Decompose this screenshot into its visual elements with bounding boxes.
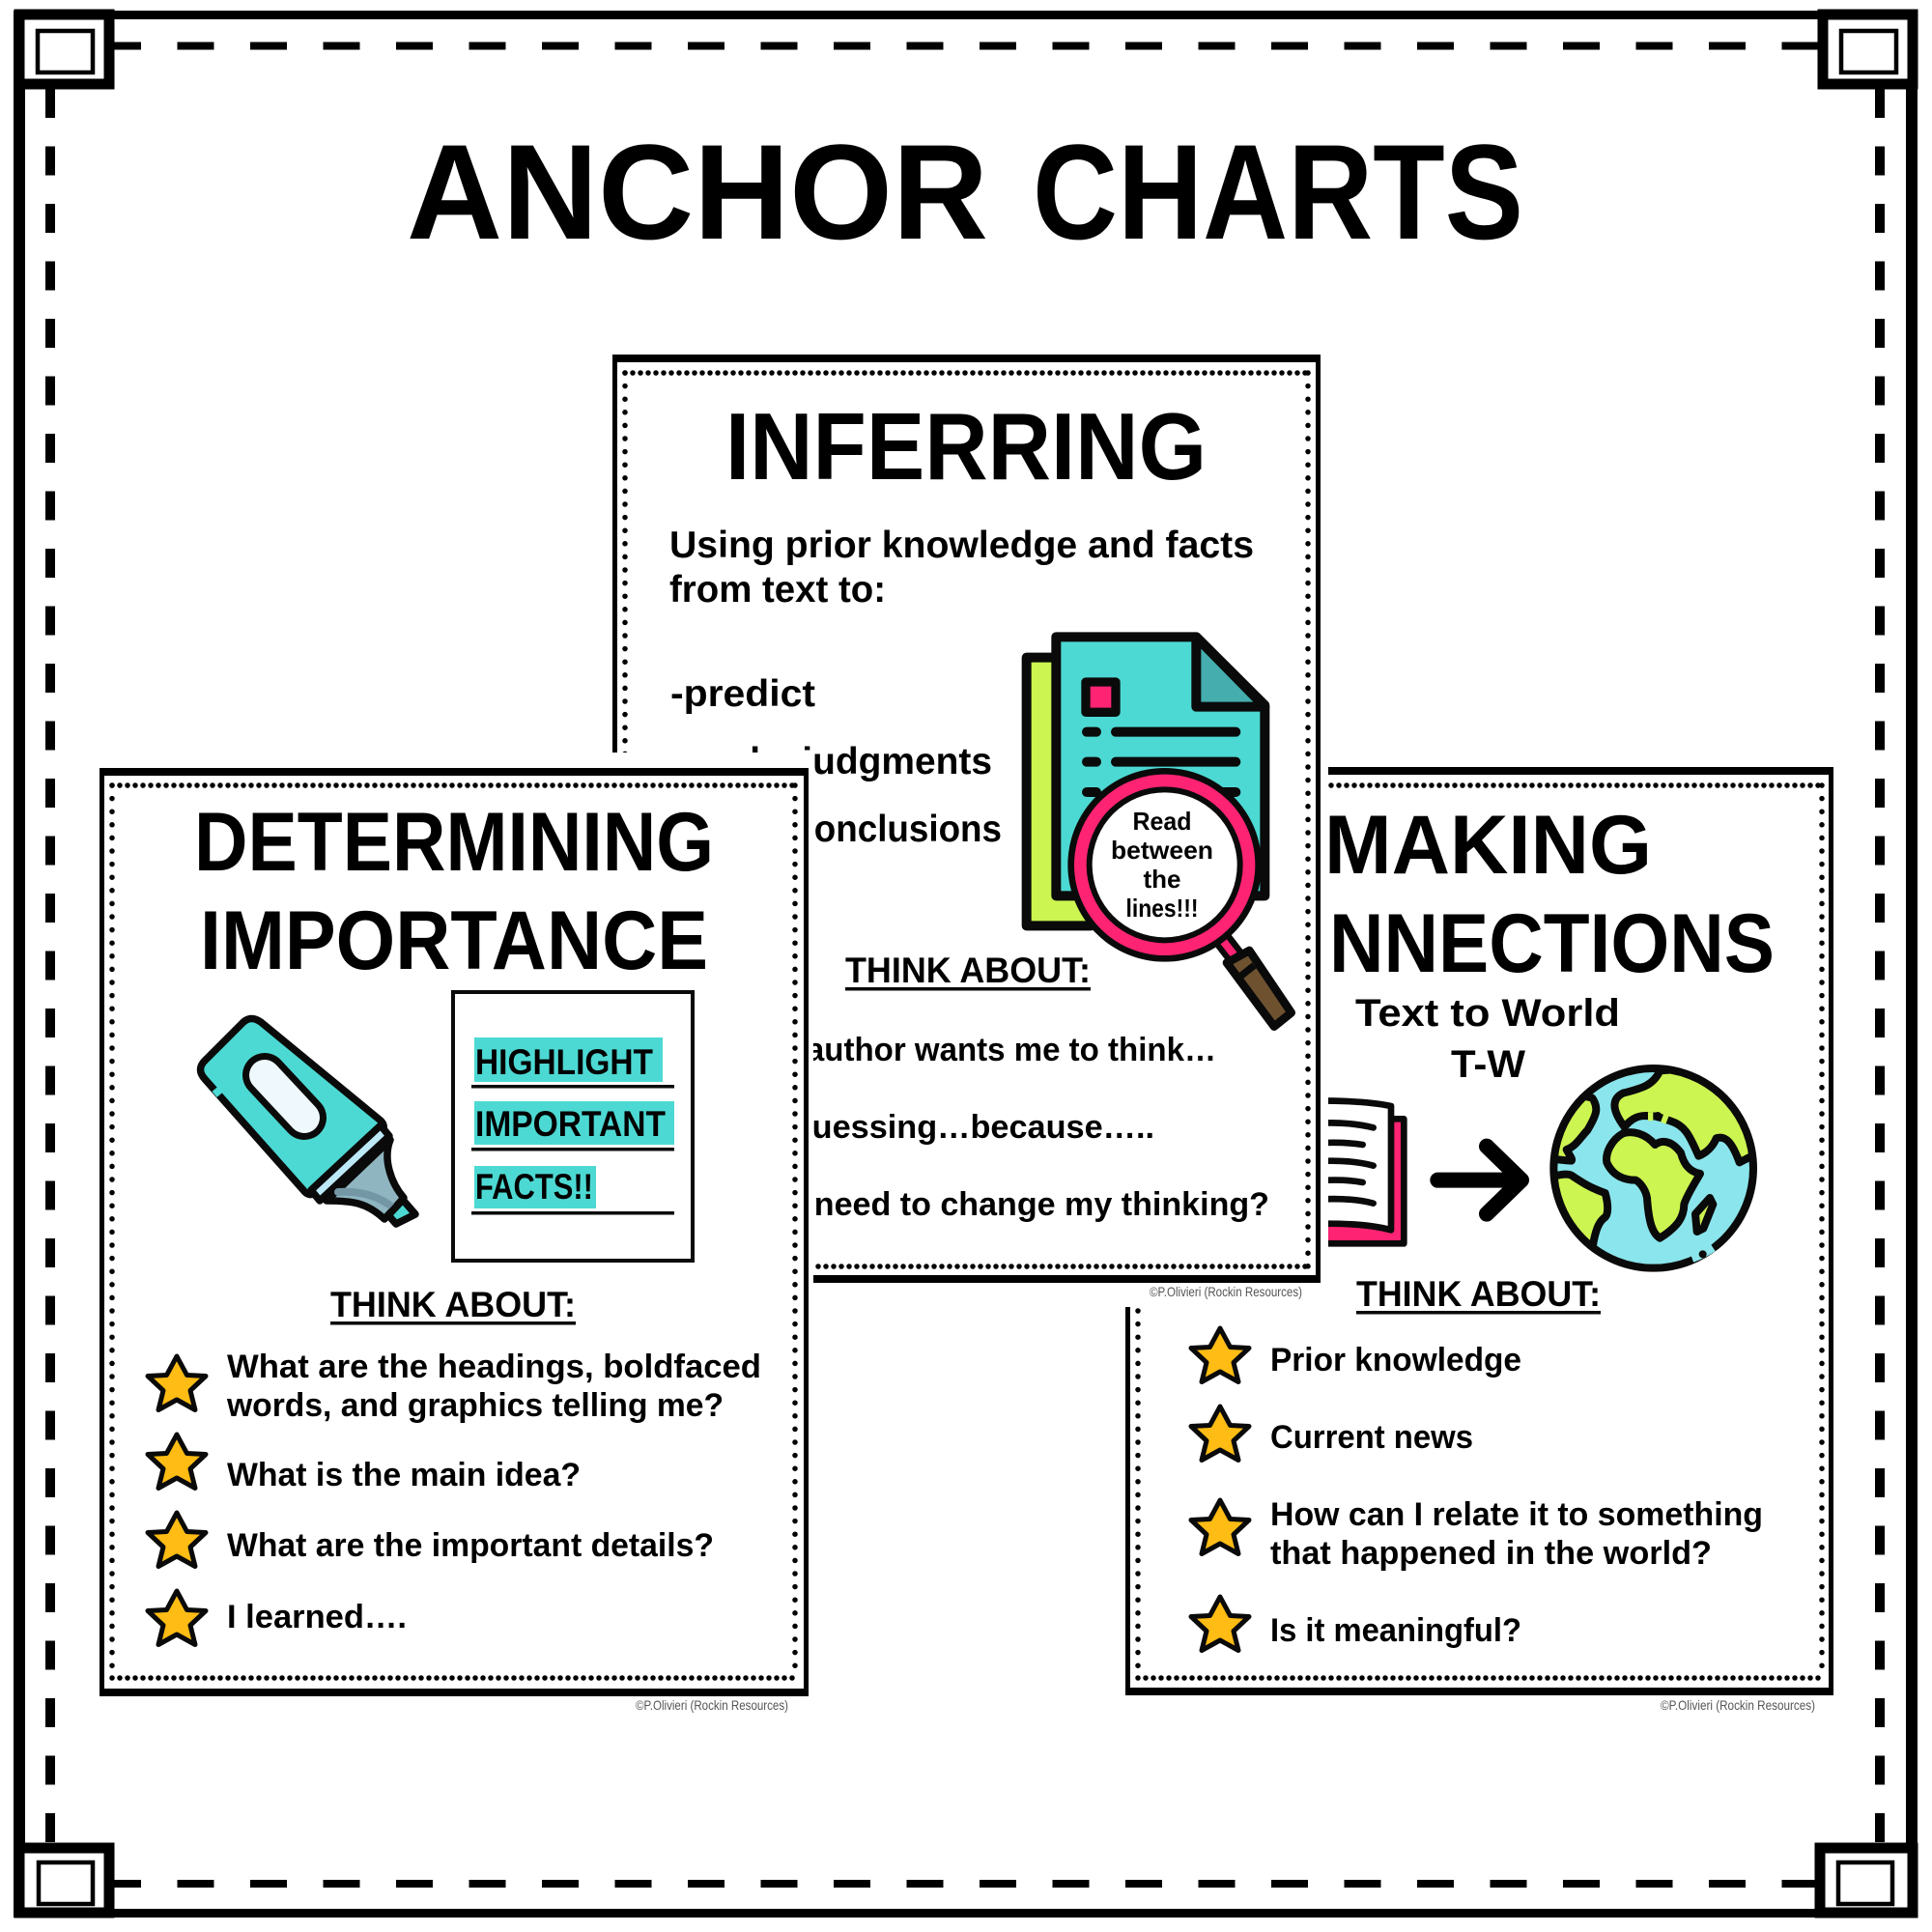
title: ANCHOR [407,116,988,268]
star list: think about: Current news [1270,1419,1473,1456]
star list: think about: I learned…. [227,1599,407,1635]
list: think about [667,1019,1269,1227]
magnifier text [1111,807,1213,923]
heading: think about: THINK ABOUT: [330,1285,576,1324]
icon: magnifying glass [1067,768,1292,1027]
heading: making connections: NNECTIONS [1329,897,1775,990]
icon: globe [1539,1063,1765,1268]
star list: think about [1191,1328,1763,1650]
panel: determining importance [93,753,813,1713]
subheading: text to world: Text to World [1355,992,1620,1035]
list: predict, judgments, conclusions [670,673,1002,850]
heading: think about: THINK ABOUT: [1356,1274,1601,1314]
copyright note: ©P.Olivieri (Rockin Resources) [636,1697,788,1713]
magnifier text: between [1111,836,1213,865]
list: think about: I'm guessing…because….. [736,1109,1154,1146]
heading: determining importance [194,796,714,987]
highlighted notepad [453,992,693,1261]
panel: making connections [1125,767,1833,1713]
magnifier text: the [1144,865,1180,894]
heading: making connections [1183,799,1775,990]
heading: determining importance: DETERMINING [194,796,714,889]
star list: think about: What are the important details? [227,1527,714,1564]
subheading: text to world [1355,992,1620,1086]
subheading: text to world: T-W [1451,1043,1525,1086]
arrow: book to world [1437,1147,1521,1214]
heading: determining importance: IMPORTANCE [200,895,708,987]
highlighted notepad: IMPORTANT [475,1104,666,1144]
title: CHARTS [1033,116,1523,268]
icon: open book [1282,1100,1404,1243]
icon: document [1027,637,1264,925]
icon: highlighter marker [201,1018,415,1224]
copyright note: ©P.Olivieri (Rockin Resources) [1661,1697,1815,1713]
star list: think about: Is it meaningful? [1270,1612,1521,1649]
star list: think about: words, and graphics telling me? [226,1387,724,1424]
star list: think about: What are the headings, boldfaced [227,1349,761,1385]
panel: inferring [607,348,1328,1307]
list: predict, judgments, conclusions: -draw conclusions [690,809,1002,850]
definition text: from text to: [669,569,886,611]
highlighted notepad: FACTS!! [475,1167,593,1207]
list: think about: Do I need to change my thinking? [743,1186,1269,1223]
definition text: Using prior knowledge and facts [669,525,1254,566]
list: think about: The author wants me to think… [741,1032,1216,1068]
star list: think about [148,1349,761,1644]
heading: inferring: INFERRING [725,393,1207,499]
heading: think about: THINK ABOUT: [845,951,1091,990]
title [407,116,1523,268]
copyright note: ©P.Olivieri (Rockin Resources) [1150,1284,1302,1299]
list: predict, judgments, conclusions: -predict [670,673,815,715]
star list: think about: How can I relate it to something [1270,1496,1763,1533]
magnifier text: lines!!! [1126,894,1198,923]
heading: making connections: MAKING [1324,799,1652,892]
star list: think about: What is the main idea? [227,1457,581,1493]
heading: making connections: CO [1183,897,1299,990]
star list: think about: that happened in the world? [1270,1535,1712,1572]
highlighted notepad: HIGHLIGHT [475,1042,653,1082]
definition text [669,525,1254,611]
star list: think about: Prior knowledge [1270,1342,1521,1378]
magnifier text: Read [1132,807,1192,836]
list: predict, judgments, conclusions: -make judgments [683,741,992,782]
